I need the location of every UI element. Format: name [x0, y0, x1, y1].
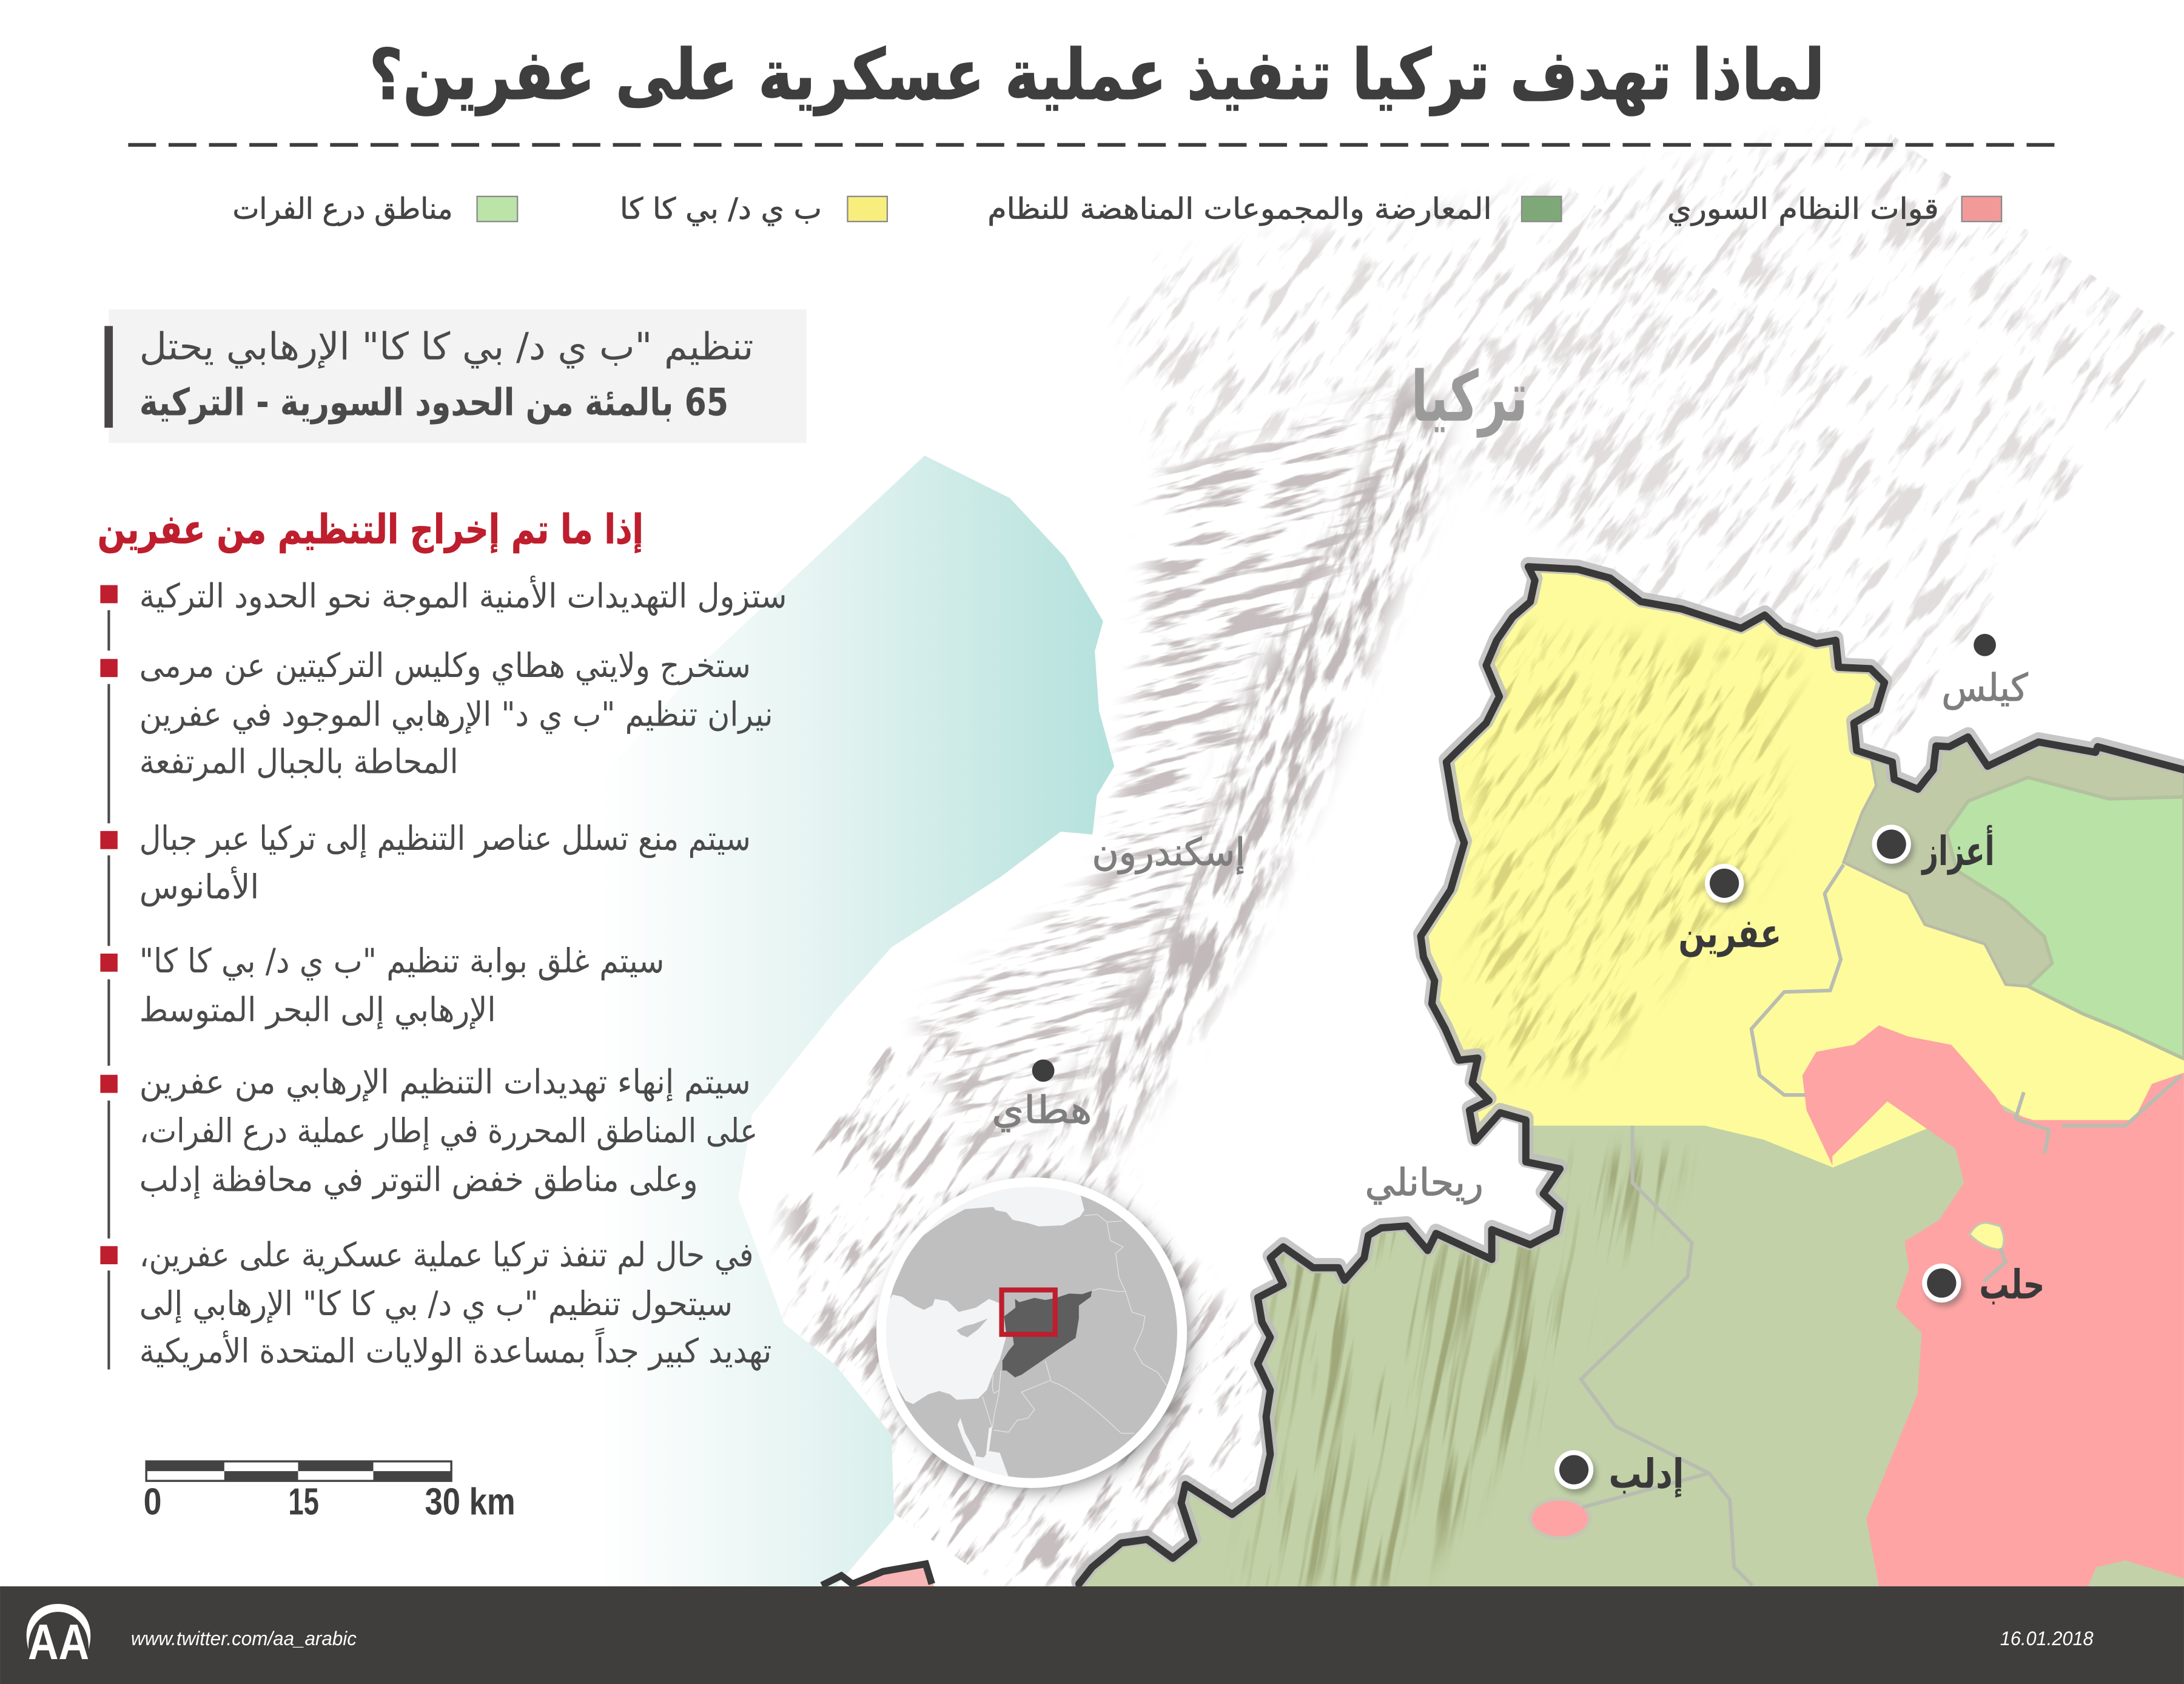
country borders [983, 1214, 1166, 1433]
scale bar [144, 1461, 516, 1523]
scale bar: 15 [288, 1481, 319, 1523]
panel: border statistic [104, 309, 807, 443]
Red Sea [974, 1451, 1009, 1477]
item 5: سيتم إنهاء تهديدات التنظيم الإرهابي من عفرين [139, 1063, 751, 1102]
item 3: سيتم منع تسلل عناصر التنظيم إلى تركيا عبر جبال [139, 819, 751, 858]
Mediterranean [881, 1295, 1006, 1404]
city: Azaz [1872, 824, 1995, 875]
relief over Idlib countryside [1170, 1068, 1755, 1677]
footer link: www.twitter.com/aa_arabic [131, 1628, 357, 1649]
Syria [1003, 1291, 1092, 1378]
map: Syria border line [1079, 565, 2184, 1584]
list of consequences [100, 575, 787, 1371]
city: Iskenderun: إسكندرون [1092, 830, 1245, 875]
city: Reyhanli: ريحانلي [1365, 1160, 1483, 1204]
city: Azaz: أعزاز [1921, 824, 1995, 875]
item 6 [139, 1236, 771, 1371]
relief over Afrin [1169, 389, 2090, 1310]
zone: opposition green [1058, 1100, 2184, 1587]
item 6: تهديد كبير جداً بمساعدة الولايات المتحدة الأمريكية [139, 1327, 771, 1371]
zone: regime red [1803, 1025, 2184, 1587]
zone: yellow pocket near Aleppo [1969, 1223, 2004, 1250]
legend: regime forces: قوات النظام السوري [1667, 192, 1939, 226]
item 2: المحاطة بالجبال المرتفعة [139, 743, 459, 781]
map: terrain relief [671, 16, 2178, 1677]
land [886, 1187, 1177, 1478]
Gulf of Suez [958, 1418, 976, 1464]
scale bar: 0 [144, 1481, 161, 1523]
city: Hatay: هطاي [992, 1088, 1092, 1132]
legend: opposition: المعارضة والمجموعات المناهضة للنظام [987, 192, 1492, 226]
Gulf of Aqaba [986, 1427, 992, 1457]
item 6: في حال لم تنفذ تركيا عملية عسكرية على عفرين، [139, 1236, 753, 1275]
item 2: ستخرج ولايتي هطاي وكليس التركيتين عن مرمى [139, 646, 751, 685]
zone: PYD/PKK yellow [1393, 550, 2184, 1167]
heading: if the organization is removed: إذا ما تم إخراج التنظيم من عفرين [98, 506, 643, 554]
item 1: ستزول التهديدات الأمنية الموجة نحو الحدود التركية [139, 575, 787, 616]
city: Kilis [1941, 634, 2028, 710]
red locator frame [1002, 1290, 1055, 1335]
statistic line one: تنظيم "ب ي د/ بي كا كا" الإرهابي يحتل [139, 324, 753, 369]
legend: Euphrates Shield: مناطق درع الفرات [233, 192, 452, 226]
map: coastal regime pocket [822, 1564, 934, 1587]
item 2: نيران تنظيم "ب ي د" الإرهابي الموجود في عفرين [139, 695, 773, 734]
map: sea [418, 456, 1114, 1587]
item 2 [139, 646, 773, 781]
item 3: الأمانوس [139, 866, 259, 907]
item 6: سيتحول تنظيم "ب ي د/ بي كا كا" الإرهابي إلى [139, 1284, 733, 1324]
item 5: وعلى مناطق خفض التوتر في محافظة إدلب [139, 1160, 698, 1200]
item 4: الإرهابي إلى البحر المتوسط [139, 990, 496, 1029]
logo: Anadolu Agency: AA [28, 1614, 89, 1670]
title: لماذا تهدف تركيا تنفيذ عملية عسكرية على عفرين؟ [369, 35, 1824, 116]
Black Sea and outer north-west [874, 1177, 1084, 1286]
zone: opposition near Azaz [1844, 738, 2184, 1059]
city: Aleppo [1922, 1261, 2045, 1308]
item 5 [139, 1063, 758, 1200]
internal province lines [1581, 864, 2181, 1585]
Cyprus [956, 1318, 988, 1337]
legend [233, 192, 2001, 226]
map label: Turkey: تركيا [1411, 357, 1528, 438]
scale bar: 30 km [425, 1481, 516, 1523]
footer date: 16.01.2018 [2000, 1628, 2094, 1649]
statistic line two: 65 بالمئة من الحدود السورية - التركية [139, 380, 728, 424]
item 3 [139, 819, 751, 907]
city: Idlib: إدلب [1608, 1450, 1684, 1498]
footer bar [0, 1586, 2184, 1684]
city: Hatay [992, 1059, 1092, 1132]
city: Afrin: عفرين [1678, 910, 1781, 958]
item 5: على المناطق المحررة في إطار عملية درع الفرات، [139, 1111, 758, 1151]
city: Kilis: كيلس [1941, 665, 2028, 710]
city: Aleppo: حلب [1979, 1261, 2045, 1308]
zone: green pocket south-east [2088, 1560, 2184, 1587]
zone: regime pocket near Idlib [1530, 1499, 1590, 1538]
item 4 [139, 941, 664, 1029]
city: Idlib [1554, 1450, 1684, 1498]
item 4: سيتم غلق بوابة تنظيم "ب ي د/ بي كا كا" [139, 941, 664, 981]
city: Afrin [1678, 864, 1781, 958]
map: Syria control zones [1082, 571, 2184, 1587]
inset locator globe [874, 1177, 1189, 1490]
legend: PYD/PKK: ب ي د/ بي كا كا [620, 192, 822, 226]
zone: Euphrates Shield light green [1946, 777, 2184, 1059]
